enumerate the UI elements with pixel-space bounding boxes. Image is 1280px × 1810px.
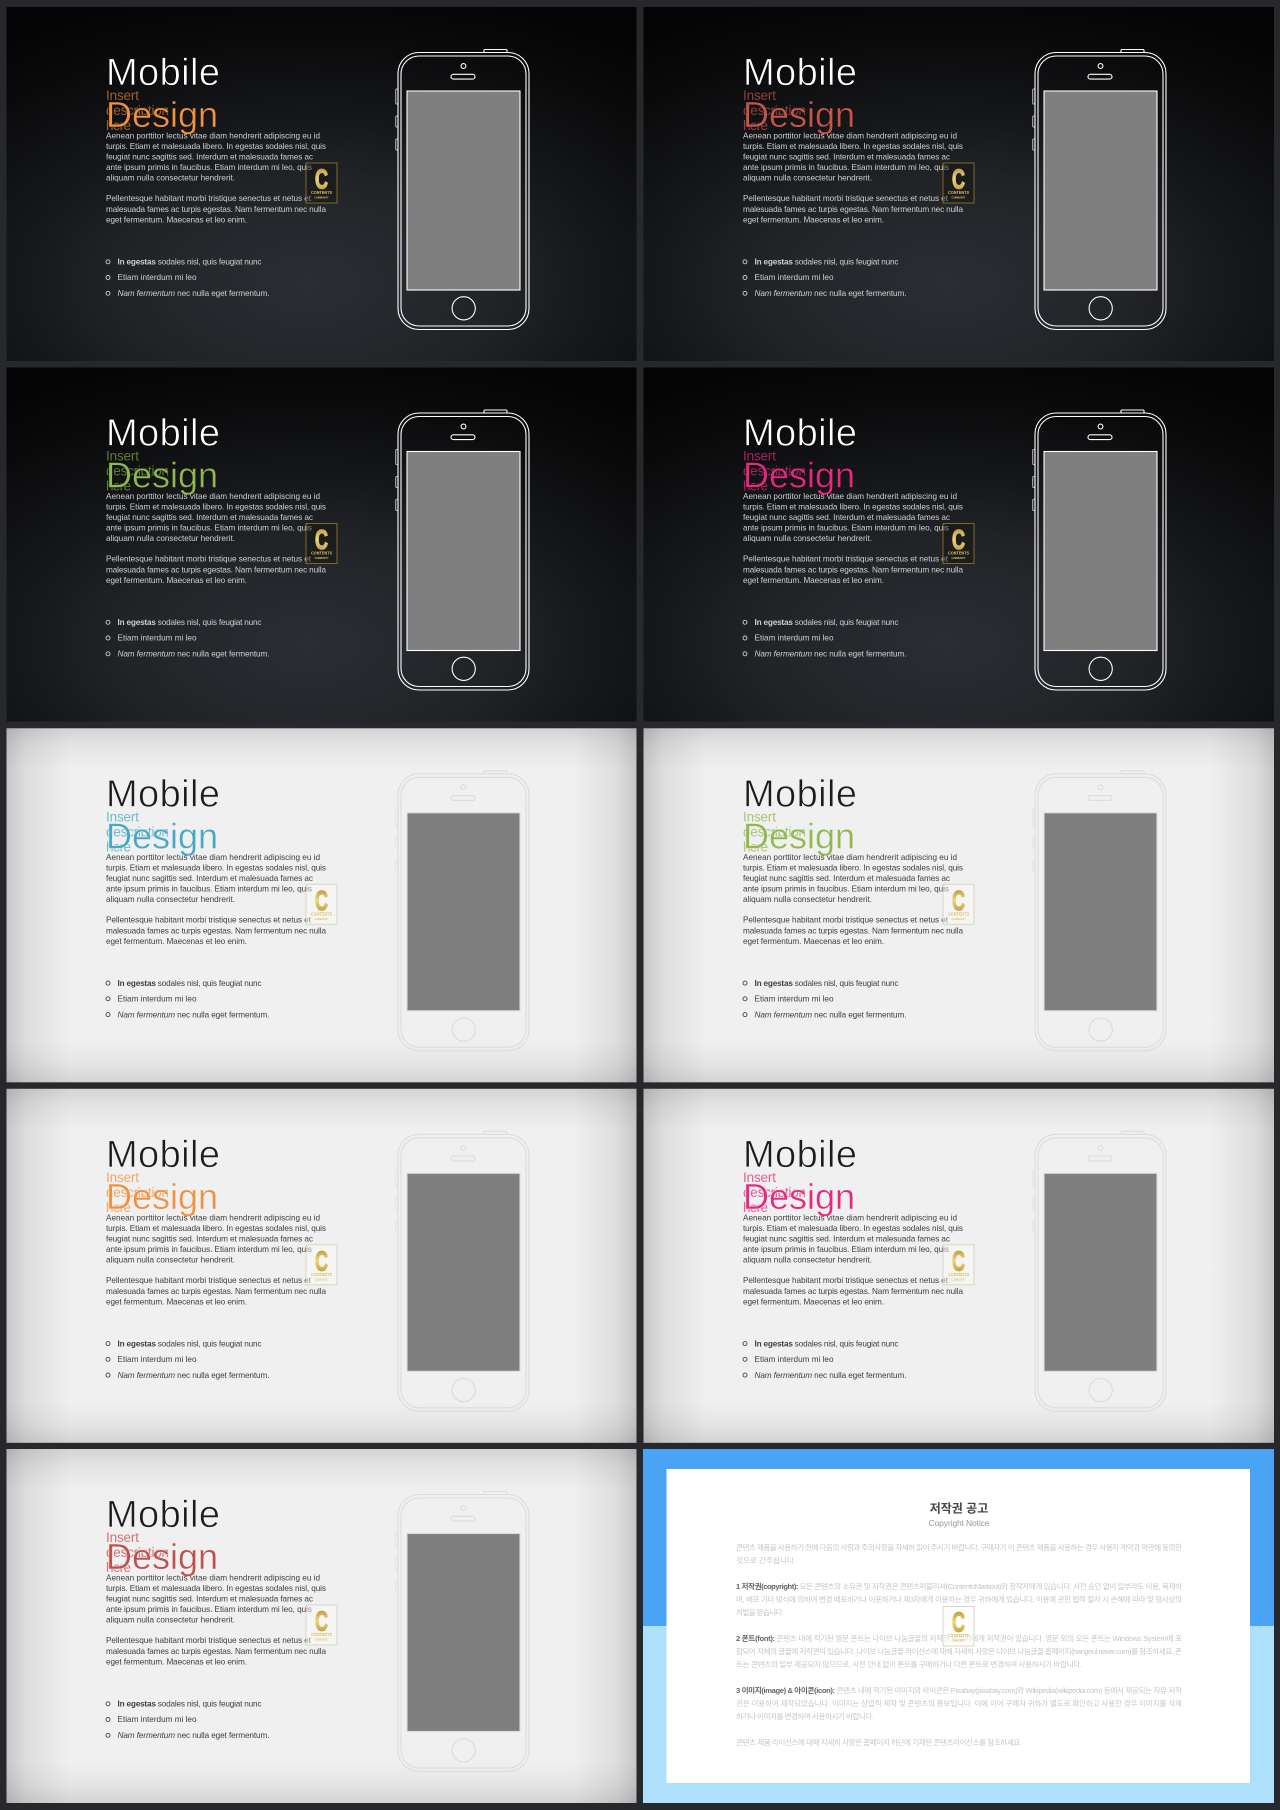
bullet list: Nam fermentum nec nulla eget fermentum. [754,1010,906,1019]
body text: eget fermentum. Maecenas et leo enim. [743,576,884,585]
watermark badge: C [952,524,965,555]
body text: feugiat nunc sagittis sed. Interdum et malesuada fames ac [106,1234,313,1243]
body text: ante ipsum primis in faucibus. Etiam interdum mi leo, quis [106,524,312,532]
watermark badge: COMMUNITY [952,1277,966,1281]
body text: eget fermentum. Maecenas et leo enim. [106,216,247,224]
watermark badge: COMMUNITY [314,917,329,921]
bullet list: Etiam interdum mi leo [118,1715,197,1724]
body text: turpis. Etiam et malesuada libero. In egestas sodales nisl, quis [743,863,963,872]
phone outline [396,410,529,690]
description placeholder: here [106,1560,131,1575]
body text: feugiat nunc sagittis sed. Interdum et malesuada fames ac [106,513,313,522]
bullet list [743,979,906,1019]
title: Design: Design [106,94,218,135]
title: Design: Design [106,815,218,856]
body text: Pellentesque habitant morbi tristique senectus et netus et [743,554,949,564]
bullet list: Nam fermentum nec nulla eget fermentum. [118,650,270,658]
watermark badge: C [315,1606,328,1636]
slide 1: dark orange [6,7,636,361]
body text: Aenean porttitor lectus vitae diam hendrerit adipiscing eu id [743,132,957,140]
bullet list: In egestas sodales nisl, quis feugiat nunc [754,979,898,988]
description placeholder: description [106,824,169,839]
watermark badge [306,163,337,203]
description placeholder: here [743,1200,768,1215]
bullet list [106,618,270,658]
watermark badge: COMMUNITY [952,556,966,560]
body text: aliquam nulla consectetur hendrerit. [106,1616,235,1624]
body text [106,132,326,224]
bullet list: In egestas sodales nisl, quis feugiat nunc [754,1339,898,1348]
section 2: font: 함되어 자체의 글꼴에 저작권이 있습니다. 나이브 나눔글꼴 라이선스에 대해 자세히 사항은 나이브 나눔글꼴 홈페이지(hangeul.naver.com)를 참조하세요. 폰 [736,1646,1182,1656]
phone outline [396,50,529,330]
description placeholder [106,1170,169,1215]
phone outline [1033,410,1166,690]
description placeholder: Insert [743,809,776,824]
body text [743,1213,963,1306]
section 1: copyright: 처벌을 받습니다. [736,1607,784,1617]
title: Mobile: Mobile [106,773,220,815]
watermark badge: C [315,1245,328,1276]
body text: aliquam nulla consectetur hendrerit. [743,534,872,543]
bullet list: Nam fermentum nec nulla eget fermentum. [118,1731,270,1740]
description placeholder: here [106,478,131,494]
watermark badge: CONTENTS [311,911,332,916]
watermark badge [306,884,337,924]
body text: ante ipsum primis in faucibus. Etiam interdum mi leo, quis [106,163,312,172]
watermark badge: CONTENTS [948,1272,969,1277]
body text: Pellentesque habitant morbi tristique senectus et netus et [106,554,312,564]
bullet list [106,1339,270,1380]
description placeholder: here [743,839,768,854]
body text [743,853,963,946]
bullet list: Nam fermentum nec nulla eget fermentum. [754,650,906,658]
title: Design: Design [743,815,855,856]
body text [743,132,963,224]
description placeholder: description [106,1185,169,1200]
title: Mobile: Mobile [743,773,857,815]
body text: ante ipsum primis in faucibus. Etiam interdum mi leo, quis [106,884,312,893]
description placeholder: here [106,1200,131,1215]
description placeholder [106,809,169,854]
body text: eget fermentum. Maecenas et leo enim. [743,216,884,224]
watermark badge: C [952,885,965,916]
watermark badge [943,163,974,203]
body text: turpis. Etiam et malesuada libero. In egestas sodales nisl, quis [743,1224,963,1233]
closing line: 콘텐츠 제품 라이선스에 대해 자세히 사항은 홈페이지 하단에 기재된 콘텐츠라이선스를 참조하세요. [736,1737,1022,1747]
slide background [644,728,1274,1082]
slide background [644,368,1274,722]
notice intro: 콘텐츠 제품을 사용하기 전에 다음의 사항과 주의사항을 자세히 읽어 주시기 바랍니다. 구매자가 이 콘텐츠 제품을 사용하는 경우 사용자 계약과 약관에 동의한 [736,1542,1182,1552]
description placeholder: description [743,464,806,478]
body text: Aenean porttitor lectus vitae diam hendrerit adipiscing eu id [743,853,957,862]
bullet list [743,618,906,658]
description placeholder: here [743,118,768,133]
watermark badge: C [315,524,328,555]
watermark badge: CONTENTS [311,1272,332,1277]
slide background [6,1449,636,1803]
slide 4: dark pink [644,368,1274,722]
bullet list: In egestas sodales nisl, quis feugiat nunc [118,1700,262,1708]
body text: aliquam nulla consectetur hendrerit. [743,895,872,904]
watermark badge: CONTENTS [311,550,332,556]
slide 8: light pink [644,1089,1274,1443]
slide 3: dark green [6,368,636,722]
description placeholder: Insert [106,88,139,103]
watermark badge: CONTENTS [311,1632,332,1637]
body text: eget fermentum. Maecenas et leo enim. [743,1297,884,1306]
description placeholder: Insert [743,88,776,103]
bullet list: Nam fermentum nec nulla eget fermentum. [754,1371,906,1380]
body text: aliquam nulla consectetur hendrerit. [106,174,235,182]
bullet list: Nam fermentum nec nulla eget fermentum. [118,1371,270,1380]
body text: ante ipsum primis in faucibus. Etiam interdum mi leo, quis [743,884,949,893]
body text: turpis. Etiam et malesuada libero. In egestas sodales nisl, quis [106,863,326,872]
body text: aliquam nulla consectetur hendrerit. [106,534,235,543]
watermark badge: C [315,885,328,916]
watermark badge: CONTENTS [948,911,969,916]
description placeholder: description [106,1545,169,1560]
body text: malesuada fames ac turpis egestas. Nam fermentum nec nulla [106,1287,326,1296]
bullet list: In egestas sodales nisl, quis feugiat nunc [118,1339,262,1348]
body text: feugiat nunc sagittis sed. Interdum et malesuada fames ac [743,513,950,522]
title: Mobile: Mobile [743,1134,857,1176]
body text [106,492,326,585]
phone outline [1033,1131,1166,1411]
body text: malesuada fames ac turpis egestas. Nam fermentum nec nulla [743,926,963,935]
notice subtitle: Copyright Notice [928,1518,990,1528]
notice intro [736,1542,1182,1565]
description placeholder: here [106,839,131,854]
body text: Aenean porttitor lectus vitae diam hendrerit adipiscing eu id [106,853,320,862]
title: Mobile: Mobile [106,1134,220,1176]
watermark badge [306,1605,337,1645]
body text [106,1574,326,1666]
bullet list: Etiam interdum mi leo [118,1355,197,1364]
body text: eget fermentum. Maecenas et leo enim. [106,1297,247,1306]
bullet list: Etiam interdum mi leo [754,634,834,642]
title: Mobile: Mobile [106,412,220,454]
body text: aliquam nulla consectetur hendrerit. [106,895,235,904]
description placeholder: Insert [743,448,776,464]
bullet list: Etiam interdum mi leo [118,994,197,1003]
description placeholder [743,1170,806,1215]
body text: Aenean porttitor lectus vitae diam hendrerit adipiscing eu id [106,1213,320,1222]
watermark badge: C [315,164,328,194]
watermark badge: COMMUNITY [314,1638,329,1642]
body text: Aenean porttitor lectus vitae diam hendrerit adipiscing eu id [106,492,320,501]
bullet list: Etiam interdum mi leo [754,994,834,1003]
bullet list: Nam fermentum nec nulla eget fermentum. [118,289,270,298]
watermark badge: C [952,164,965,194]
description placeholder [743,448,806,494]
phone outline [1033,50,1166,330]
body text: eget fermentum. Maecenas et leo enim. [743,937,884,946]
description placeholder [106,1530,169,1575]
section 2: font [736,1633,1182,1669]
body text: turpis. Etiam et malesuada libero. In egestas sodales nisl, quis [743,502,963,512]
bullet list: In egestas sodales nisl, quis feugiat nunc [118,258,262,266]
description placeholder: here [743,478,768,494]
watermark badge [943,1245,974,1285]
watermark badge: COMMUNITY [952,917,966,921]
bullet list: In egestas sodales nisl, quis feugiat nunc [118,618,262,627]
description placeholder: Insert [106,1170,139,1185]
watermark badge [306,524,337,564]
watermark badge: CONTENTS [311,190,332,195]
body text: Aenean porttitor lectus vitae diam hendrerit adipiscing eu id [743,492,957,501]
bullet list [743,258,906,298]
body text: turpis. Etiam et malesuada libero. In egestas sodales nisl, quis [106,1584,326,1593]
bullet list: Nam fermentum nec nulla eget fermentum. [118,1010,270,1019]
section 3: image and icon: 3 이미지(image) & 아이콘(icon): 콘텐츠 내에 적기된 이미지와 아이콘은 Pixabay(pixabay.com)와 Wikipedia(wikipedia.com) 등에서 제공되는 자유 저작 [736,1685,1182,1695]
section 1: copyright: 며, 배포 기타 방식에 의하여 변경 배포하거나 이용하거나 제3자에게 이용하는 경우 귀하에게 있습니다. 이용에 관한 법적 절차 시 손해에 따라 및 형사상의 [736,1594,1182,1604]
body text: eget fermentum. Maecenas et leo enim. [106,1658,247,1666]
bullet list: In egestas sodales nisl, quis feugiat nunc [118,979,262,988]
title: Mobile: Mobile [743,412,857,454]
watermark badge: CONTENTS [948,550,969,556]
body text: turpis. Etiam et malesuada libero. In egestas sodales nisl, quis [743,142,963,151]
watermark badge: COMMUNITY [314,196,329,200]
body text: feugiat nunc sagittis sed. Interdum et malesuada fames ac [106,152,313,162]
body text [106,853,326,946]
bullet list: Etiam interdum mi leo [754,1355,834,1364]
description placeholder [106,448,169,494]
phone outline [1033,771,1166,1051]
slide background [6,7,636,361]
body text: malesuada fames ac turpis egestas. Nam fermentum nec nulla [743,205,963,214]
body text: feugiat nunc sagittis sed. Interdum et malesuada fames ac [106,874,313,883]
body text: Pellentesque habitant morbi tristique senectus et netus et [106,915,312,924]
bullet list [106,258,270,298]
watermark badge: COMMUNITY [952,1638,966,1642]
body text: Pellentesque habitant morbi tristique senectus et netus et [743,915,949,924]
white notice panel [666,1469,1250,1783]
phone outline [396,1131,529,1411]
description placeholder [106,88,169,133]
body text: Aenean porttitor lectus vitae diam hendrerit adipiscing eu id [106,1574,320,1582]
body text: turpis. Etiam et malesuada libero. In egestas sodales nisl, quis [106,1224,326,1233]
slide 6: light green [644,728,1274,1082]
body text: eget fermentum. Maecenas et leo enim. [106,937,247,946]
body text: Pellentesque habitant morbi tristique senectus et netus et [106,1276,312,1285]
section 1: copyright [736,1581,1182,1617]
body text: malesuada fames ac turpis egestas. Nam fermentum nec nulla [106,926,326,935]
section 3: image and icon: 하거나 이미지를 변경하여 사용하시기 바랍니다. [736,1711,874,1721]
watermark badge: COMMUNITY [314,556,329,560]
title: Design: Design [743,94,855,135]
title: Mobile: Mobile [106,52,220,94]
body text: turpis. Etiam et malesuada libero. In egestas sodales nisl, quis [106,142,326,151]
title: Design: Design [743,454,855,496]
body text: ante ipsum primis in faucibus. Etiam interdum mi leo, quis [743,163,949,172]
slide 9: light red [6,1449,636,1803]
description placeholder: description [106,103,169,118]
body text: malesuada fames ac turpis egestas. Nam fermentum nec nulla [106,566,326,574]
description placeholder: description [743,1185,806,1200]
body text: ante ipsum primis in faucibus. Etiam interdum mi leo, quis [106,1605,312,1614]
title: Design: Design [106,454,218,496]
body text: feugiat nunc sagittis sed. Interdum et malesuada fames ac [743,874,950,883]
slide background [644,1089,1274,1443]
slide 2: dark red [644,7,1274,361]
body text: eget fermentum. Maecenas et leo enim. [106,576,247,585]
body text: Pellentesque habitant morbi tristique senectus et netus et [106,1636,312,1645]
bullet list: Nam fermentum nec nulla eget fermentum. [754,289,906,298]
description placeholder [743,88,806,133]
title: Design: Design [743,1176,855,1217]
bullet list: In egestas sodales nisl, quis feugiat nunc [754,258,898,266]
description placeholder: Insert [106,448,139,464]
phone outline [396,771,529,1051]
body text: Aenean porttitor lectus vitae diam hendrerit adipiscing eu id [106,132,320,140]
body text: feugiat nunc sagittis sed. Interdum et malesuada fames ac [106,1594,313,1604]
description placeholder: Insert [106,1530,139,1545]
bullet list [106,979,270,1019]
body text: malesuada fames ac turpis egestas. Nam fermentum nec nulla [106,205,326,214]
bullet list: Etiam interdum mi leo [754,273,834,282]
watermark badge: C [952,1606,965,1638]
section 1: copyright: 1 저작권(copyright): 모든 콘텐츠의 소유권 및 저작권은 콘텐츠퍼블리셔(ContentsMarkout)와 창작자에게 있습니다. 사전 승인 없이 일부라도 이용, 복제하 [736,1581,1182,1591]
bullet list: In egestas sodales nisl, quis feugiat nunc [754,618,898,627]
bullet list: Etiam interdum mi leo [118,634,197,642]
section 3: image and icon [736,1685,1182,1721]
title: Mobile: Mobile [743,52,857,94]
pale blue bottom background [643,1626,1274,1803]
watermark badge: CONTENTS [948,190,969,195]
bullet list [106,1700,270,1740]
body text: ante ipsum primis in faucibus. Etiam interdum mi leo, quis [106,1245,312,1254]
description placeholder: description [743,824,806,839]
title: Design: Design [106,1176,218,1217]
body text [743,492,963,585]
body text: ante ipsum primis in faucibus. Etiam interdum mi leo, quis [743,524,949,532]
watermark badge: COMMUNITY [952,196,966,200]
watermark badge [943,884,974,924]
description placeholder: Insert [106,809,139,824]
description placeholder [743,809,806,854]
section 3: image and icon: 권은 이용하여 제작되었습니다. 이미지는 상업적 제작 및 콘텐츠의 홍보입니다. 이에 이어 구매자 귀하가 별도로 확인하고 사용한 경우 이미지를 삭제 [736,1698,1182,1708]
watermark badge: COMMUNITY [314,1277,329,1281]
title: Design: Design [106,1536,218,1577]
slide 7: light orange [6,1089,636,1443]
watermark badge [943,524,974,564]
description placeholder: here [106,118,131,133]
body text: aliquam nulla consectetur hendrerit. [106,1255,235,1264]
slide background [6,1089,636,1443]
watermark badge: C [952,1245,965,1276]
body text: malesuada fames ac turpis egestas. Nam fermentum nec nulla [743,1287,963,1296]
slide 10: copyright notice [643,1449,1274,1803]
bullet list [743,1339,906,1380]
body text: malesuada fames ac turpis egestas. Nam fermentum nec nulla [743,566,963,574]
phone outline [396,1492,529,1772]
body text: Aenean porttitor lectus vitae diam hendrerit adipiscing eu id [743,1213,957,1222]
body text: feugiat nunc sagittis sed. Interdum et malesuada fames ac [743,152,950,162]
body text: ante ipsum primis in faucibus. Etiam interdum mi leo, quis [743,1245,949,1254]
section 2: font: 트는 콘텐츠의 일부 제공되지 않으므로, 사전 안내 없이 폰트를 구매하거나 다른 폰트로 변경하여 사용하시기 바랍니다. [736,1659,1082,1669]
watermark badge: CONTENTS [948,1633,969,1638]
body text: feugiat nunc sagittis sed. Interdum et malesuada fames ac [743,1234,950,1243]
title: Mobile: Mobile [106,1494,220,1536]
description placeholder: description [743,103,806,118]
notice title: 저작권 공고 [930,1500,988,1516]
body text: aliquam nulla consectetur hendrerit. [743,1255,872,1264]
body text: turpis. Etiam et malesuada libero. In egestas sodales nisl, quis [106,502,326,512]
description placeholder: Insert [743,1170,776,1185]
body text: Pellentesque habitant morbi tristique senectus et netus et [743,1276,949,1285]
body text: malesuada fames ac turpis egestas. Nam fermentum nec nulla [106,1647,326,1656]
slide background [6,728,636,1082]
description placeholder: description [106,464,169,478]
body text [106,1213,326,1306]
section 2: font: 2 폰트(font): 콘텐츠 내에 적기된 영문 폰트는 나이브 나눔글꼴의 저작권 보유자에게 저작권이 있습니다. 영문 외의 모든 폰트는 Windows System에 포 [736,1633,1182,1643]
slide background [6,368,636,722]
watermark badge [943,1606,974,1646]
bullet list: Etiam interdum mi leo [118,273,197,282]
notice intro: 것으로 간주됩니다. [736,1555,796,1565]
slide background [644,7,1274,361]
body text: aliquam nulla consectetur hendrerit. [743,174,872,182]
body text: Pellentesque habitant morbi tristique senectus et netus et [743,194,949,203]
slide 5: light blue [6,728,636,1082]
blue top background [643,1449,1274,1626]
watermark badge [306,1245,337,1285]
body text: Pellentesque habitant morbi tristique senectus et netus et [106,194,312,203]
